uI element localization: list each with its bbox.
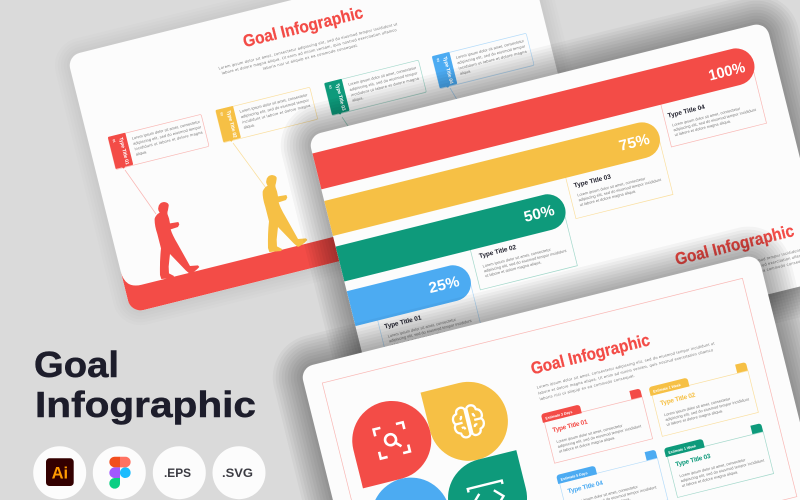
callout: type title 03: 03 bbox=[328, 85, 333, 89]
type title 03 text: adipiscing elit, sed do eiusmod tempor incididunt bbox=[578, 177, 662, 202]
panel: slide 1 walking figures bbox=[61, 0, 561, 319]
heading: goal infographic: Goal bbox=[34, 344, 119, 385]
callout: type title 02: Type Title 02 bbox=[225, 110, 238, 139]
heading: goal infographic: Infographic bbox=[35, 384, 256, 425]
card: type title 02: adipiscing elit, sed do eiusmod tempor incididunt bbox=[665, 396, 750, 422]
figure: red walking person bbox=[155, 202, 199, 279]
callout: type title 02: Lorem ipsum dolor sit amet, consectetur bbox=[239, 92, 309, 114]
card: type title 02: Estimate 1 Week bbox=[653, 383, 681, 394]
icon: adobe illustrator badge bbox=[33, 446, 86, 499]
callout: type title 01: incididunt ut labore et dolore magna bbox=[134, 129, 204, 151]
card: type title 04 bbox=[556, 449, 668, 500]
panel: slide 2 progress bars bbox=[281, 0, 800, 359]
type title 02 text: ut labore et dolore magna aliqua. bbox=[484, 259, 542, 278]
type title 01 text: adipiscing elit, sed do eiusmod tempor incididunt bbox=[388, 318, 473, 343]
type title 01 text: Lorem ipsum dolor sit amet, consectetur bbox=[387, 317, 457, 339]
callout: type title 04: adipiscing elit, sed do eiusmod tempor bbox=[457, 43, 526, 65]
type title 01 text bbox=[384, 303, 474, 349]
percent labels: 75% bbox=[617, 131, 651, 155]
panel: slide 3 teardrop cards bbox=[264, 217, 800, 500]
icon: svg badge: .SVG bbox=[222, 468, 253, 480]
heading: goal infographic bbox=[34, 344, 256, 425]
icon: blue teardrop bbox=[363, 469, 459, 500]
callout: type title 01: aliqua. bbox=[135, 149, 148, 157]
percent labels: 50% bbox=[522, 202, 556, 226]
icon: figma badge bbox=[93, 446, 146, 499]
connector lines bbox=[125, 88, 462, 214]
slide 1 intro text: Lorem ipsum dolor sit amet, consectetur adipiscing elit, sed do eiusmod tempor incididunt ut bbox=[218, 21, 398, 71]
type title 03 text: ut labore et dolore magna aliqua. bbox=[579, 188, 637, 207]
callout: type title 04: Lorem ipsum dolor sit amet, consectetur bbox=[455, 38, 525, 60]
card: type title 01: adipiscing elit, sed do eiusmod tempor incididunt bbox=[557, 423, 643, 449]
card: type title 03: adipiscing elit, sed do eiusmod tempor incididunt bbox=[680, 457, 766, 483]
card: type title 01: Lorem ipsum dolor sit amet, consectetur bbox=[556, 423, 624, 444]
slide 1 intro text: labore et dolore magna aliqua. Ut enim ad minim veniam, quis nostrud exercitation ullamco bbox=[221, 27, 397, 76]
callout: type title 01 bbox=[108, 114, 209, 171]
icon: svg badge bbox=[212, 446, 266, 499]
type title 04 text: Type Title 04 bbox=[667, 104, 706, 120]
slide 3 title: Goal Infographic bbox=[529, 330, 652, 378]
icon: yellow teardrop with brain bbox=[421, 373, 516, 469]
callout: type title 02: 02 bbox=[219, 112, 224, 117]
card: type title 03: ut labore et dolore magna aliqua. bbox=[681, 469, 739, 488]
callout: type title 01: adipiscing elit, sed do eiusmod tempor bbox=[133, 124, 202, 146]
slide 3 intro text: laboris nisi ut aliquip ex ea commodo consequat. bbox=[539, 373, 635, 401]
slide 3 intro text: Lorem ipsum dolor sit amet, consectetur adipiscing elit, sed do eiusmod tempor incididunt ut bbox=[536, 340, 716, 390]
icon: red teardrop with search bbox=[344, 393, 440, 488]
callout: type title 03: Type Title 03 bbox=[334, 83, 346, 112]
callout: type title 03: adipiscing elit, sed do eiusmod tempor bbox=[349, 70, 419, 92]
type title 03 text bbox=[573, 162, 664, 207]
type title 01 text: Type Title 01 bbox=[384, 314, 423, 331]
icon: adobe illustrator badge: Ai bbox=[52, 464, 68, 482]
callout: type title 04: incididunt ut labore et dolore magna bbox=[458, 49, 528, 71]
card: type title 01: Estimate 3 Days bbox=[545, 410, 573, 421]
card: type title 03 bbox=[664, 423, 774, 498]
card: type title 03: Type Title 03 bbox=[675, 453, 712, 468]
progress bars bbox=[312, 44, 793, 326]
type title 04 text bbox=[667, 92, 759, 138]
card: type title 02: Type Title 02 bbox=[660, 392, 697, 407]
callout: type title 02: aliqua. bbox=[243, 122, 255, 130]
slide 3 intro text: labore et dolore magna aliqua. Ut enim ad minim veniam, quis nostrud exercitation ullamco bbox=[538, 347, 713, 396]
percent labels: 100% bbox=[707, 59, 747, 84]
card: type title 03: Lorem ipsum dolor sit amet, consectetur bbox=[679, 457, 747, 478]
card: type title 01: Type Title 01 bbox=[552, 419, 589, 434]
slide 1 intro text: laboris nisi ut aliquip ex ea commodo consequat. bbox=[262, 42, 359, 71]
callout: type title 03: aliqua. bbox=[352, 95, 364, 103]
callout: type title 03 bbox=[324, 60, 427, 117]
callout: type title 02: adipiscing elit, sed do eiusmod tempor bbox=[240, 97, 310, 119]
card: type title 01: ut labore et dolore magna aliqua. bbox=[558, 435, 616, 454]
callout: type title 04: 04 bbox=[436, 58, 440, 63]
card: type title 02: Lorem ipsum dolor sit amet, consectetur bbox=[664, 396, 731, 417]
type title 02 text: adipiscing elit, sed do eiusmod tempor incididunt bbox=[483, 248, 568, 273]
card: type title 02 bbox=[648, 362, 758, 437]
card: type title 02: ut labore et dolore magna aliqua. bbox=[666, 408, 723, 427]
icon: eps badge bbox=[153, 446, 206, 499]
box outlines bbox=[340, 66, 800, 360]
icon: green teardrop with code bbox=[440, 450, 535, 500]
percent labels: 25% bbox=[427, 273, 461, 297]
callout: type title 03: Lorem ipsum dolor sit amet, consectetur bbox=[348, 65, 417, 87]
callout: type title 04: Type Title 04 bbox=[441, 56, 454, 85]
callout: type title 04 bbox=[432, 33, 534, 90]
callout: type title 03: incididunt ut labore et dolore magna bbox=[350, 75, 420, 97]
card: type title 03: Estimate 1 Week bbox=[668, 444, 696, 455]
card: type title 01 bbox=[541, 388, 653, 464]
callout: type title 02 bbox=[216, 87, 318, 144]
callout: type title 01: Type Title 01 bbox=[117, 137, 130, 166]
callout: type title 04: aliqua. bbox=[459, 68, 472, 76]
callout: type title 01: Lorem ipsum dolor sit amet, consectetur bbox=[131, 119, 201, 141]
percent labels bbox=[393, 59, 780, 297]
type title 03 text: Type Title 03 bbox=[573, 173, 612, 190]
card: type title 04: Type Title 04 bbox=[567, 480, 604, 495]
type title 02 text: Type Title 02 bbox=[478, 244, 517, 260]
type title 03 text: Lorem ipsum dolor sit amet, consectetur bbox=[577, 176, 647, 198]
ground band bbox=[121, 237, 340, 310]
figure: yellow walking person bbox=[263, 175, 307, 252]
type title 04 text: adipiscing elit, sed do eiusmod tempor incididunt bbox=[673, 107, 757, 132]
card: type title 04: Estimate 5 Days bbox=[560, 471, 588, 482]
type title 04 text: ut labore et dolore magna aliqua. bbox=[674, 118, 731, 137]
type title 04 text: Lorem ipsum dolor sit amet, consectetur bbox=[672, 106, 741, 127]
type title 02 text bbox=[478, 232, 569, 278]
type title 01 text: ut labore et dolore magna aliqua. bbox=[390, 329, 447, 348]
callout: type title 02: incididunt ut labore et dolore magna bbox=[242, 103, 312, 125]
type title 02 text: Lorem ipsum dolor sit amet, consectetur bbox=[482, 247, 552, 269]
callout: type title 01: 01 bbox=[112, 139, 116, 143]
icon: eps badge: .EPS bbox=[164, 468, 191, 480]
slide 1 title: Goal Infographic bbox=[241, 3, 365, 51]
